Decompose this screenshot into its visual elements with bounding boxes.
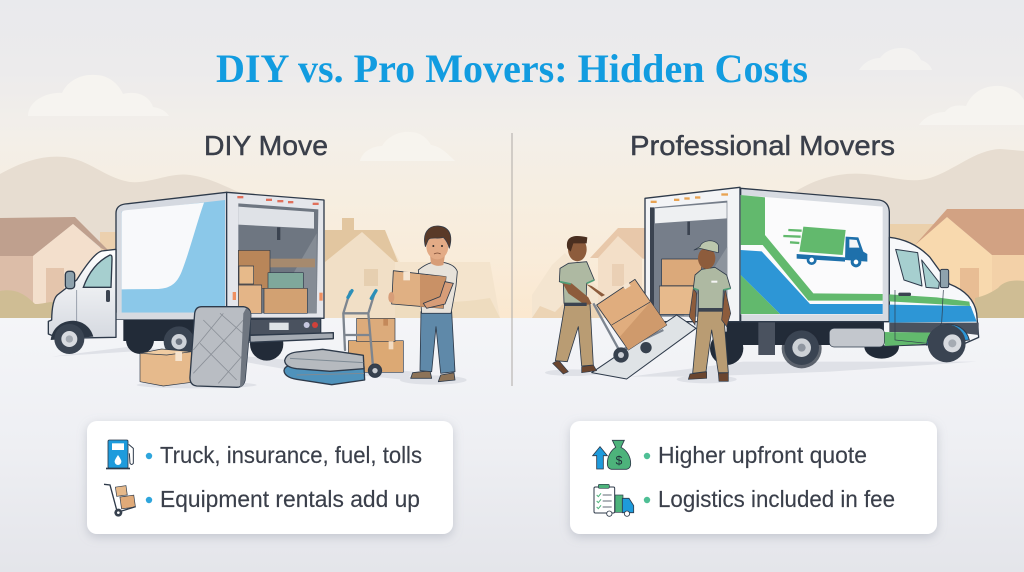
icon: arrow and money bag <box>593 440 631 469</box>
bullet <box>644 453 650 459</box>
middle wheel <box>164 326 194 357</box>
logo: moving truck <box>783 227 867 267</box>
bullet <box>644 497 650 503</box>
heading: DIY Move: DIY Move <box>204 130 328 161</box>
card background <box>87 421 453 534</box>
man <box>388 226 457 382</box>
mattress <box>190 307 251 387</box>
illustration: DIY scene <box>48 192 467 388</box>
truck rear frame <box>227 192 324 318</box>
icon: hand truck <box>104 484 136 517</box>
heading: Professional Movers: Professional Movers <box>630 130 895 161</box>
house behind movers <box>532 228 650 318</box>
cloud: large left <box>28 75 169 116</box>
card: DIY costs <box>87 421 453 534</box>
wheel: front <box>928 324 966 362</box>
door lights <box>651 193 728 203</box>
rear bumper and plate <box>250 318 333 342</box>
cloud: small centre <box>360 132 455 161</box>
background sky <box>0 0 1024 320</box>
neck and head <box>430 255 445 266</box>
truck side bottom rail <box>116 313 250 319</box>
folded blankets <box>284 349 365 385</box>
cargo boxes <box>659 259 702 314</box>
hand truck with boxes <box>593 279 667 363</box>
bullet <box>146 497 152 503</box>
centre divider <box>512 133 513 386</box>
undercarriage <box>123 318 253 341</box>
arms <box>423 282 453 308</box>
door lights <box>233 196 323 301</box>
truck box side <box>741 188 889 322</box>
background ground <box>0 318 1024 572</box>
shoes <box>411 371 455 382</box>
torso <box>418 262 457 313</box>
icon: arrow and money bag: $ <box>616 453 623 467</box>
house far left <box>0 217 130 318</box>
hand truck <box>343 291 376 370</box>
title: DIY vs. Pro Movers: Hidden Costs <box>216 46 808 91</box>
truck box side <box>116 192 227 319</box>
mover two <box>688 241 731 381</box>
cargo interior <box>650 201 727 317</box>
text: quote: Higher upfront quote <box>658 442 867 468</box>
stacked boxes by hand truck <box>348 318 403 372</box>
icon: fuel pump <box>106 440 133 469</box>
ramp <box>592 315 696 379</box>
house far right <box>880 209 1024 318</box>
wheel: rear <box>782 328 822 368</box>
background: houses right scene <box>532 209 1024 318</box>
rear frame <box>645 187 740 322</box>
illustration: professional scene <box>545 187 979 383</box>
text: truck costs: Truck, insurance, fuel, tolls <box>160 442 422 468</box>
ground shadows <box>545 362 977 383</box>
hand truck wheel <box>368 364 382 377</box>
box held <box>392 271 446 308</box>
card: professional costs <box>570 421 937 534</box>
cloud: top right <box>859 48 932 70</box>
card background <box>570 421 937 534</box>
cab <box>48 249 116 338</box>
background: houses left scene <box>0 217 500 318</box>
cab <box>883 237 979 346</box>
front box <box>140 349 192 386</box>
front wheel <box>51 321 93 354</box>
house behind DIY mover <box>325 218 500 318</box>
legs <box>420 312 455 373</box>
cloud: right <box>919 86 1024 125</box>
cargo interior <box>238 203 318 313</box>
rear wheels behind <box>710 332 899 365</box>
text: equipment: Equipment rentals add up <box>160 486 420 512</box>
undercarriage <box>727 320 890 355</box>
text: logistics: Logistics included in fee <box>658 486 895 512</box>
ground shadows <box>52 347 467 388</box>
background: hills <box>0 149 1024 260</box>
bullet <box>146 453 152 459</box>
icon: clipboard and truck <box>594 484 634 516</box>
rear wheel behind <box>126 326 283 361</box>
cargo boxes <box>238 250 307 313</box>
mover one <box>553 236 605 374</box>
fuel tank <box>829 328 884 347</box>
